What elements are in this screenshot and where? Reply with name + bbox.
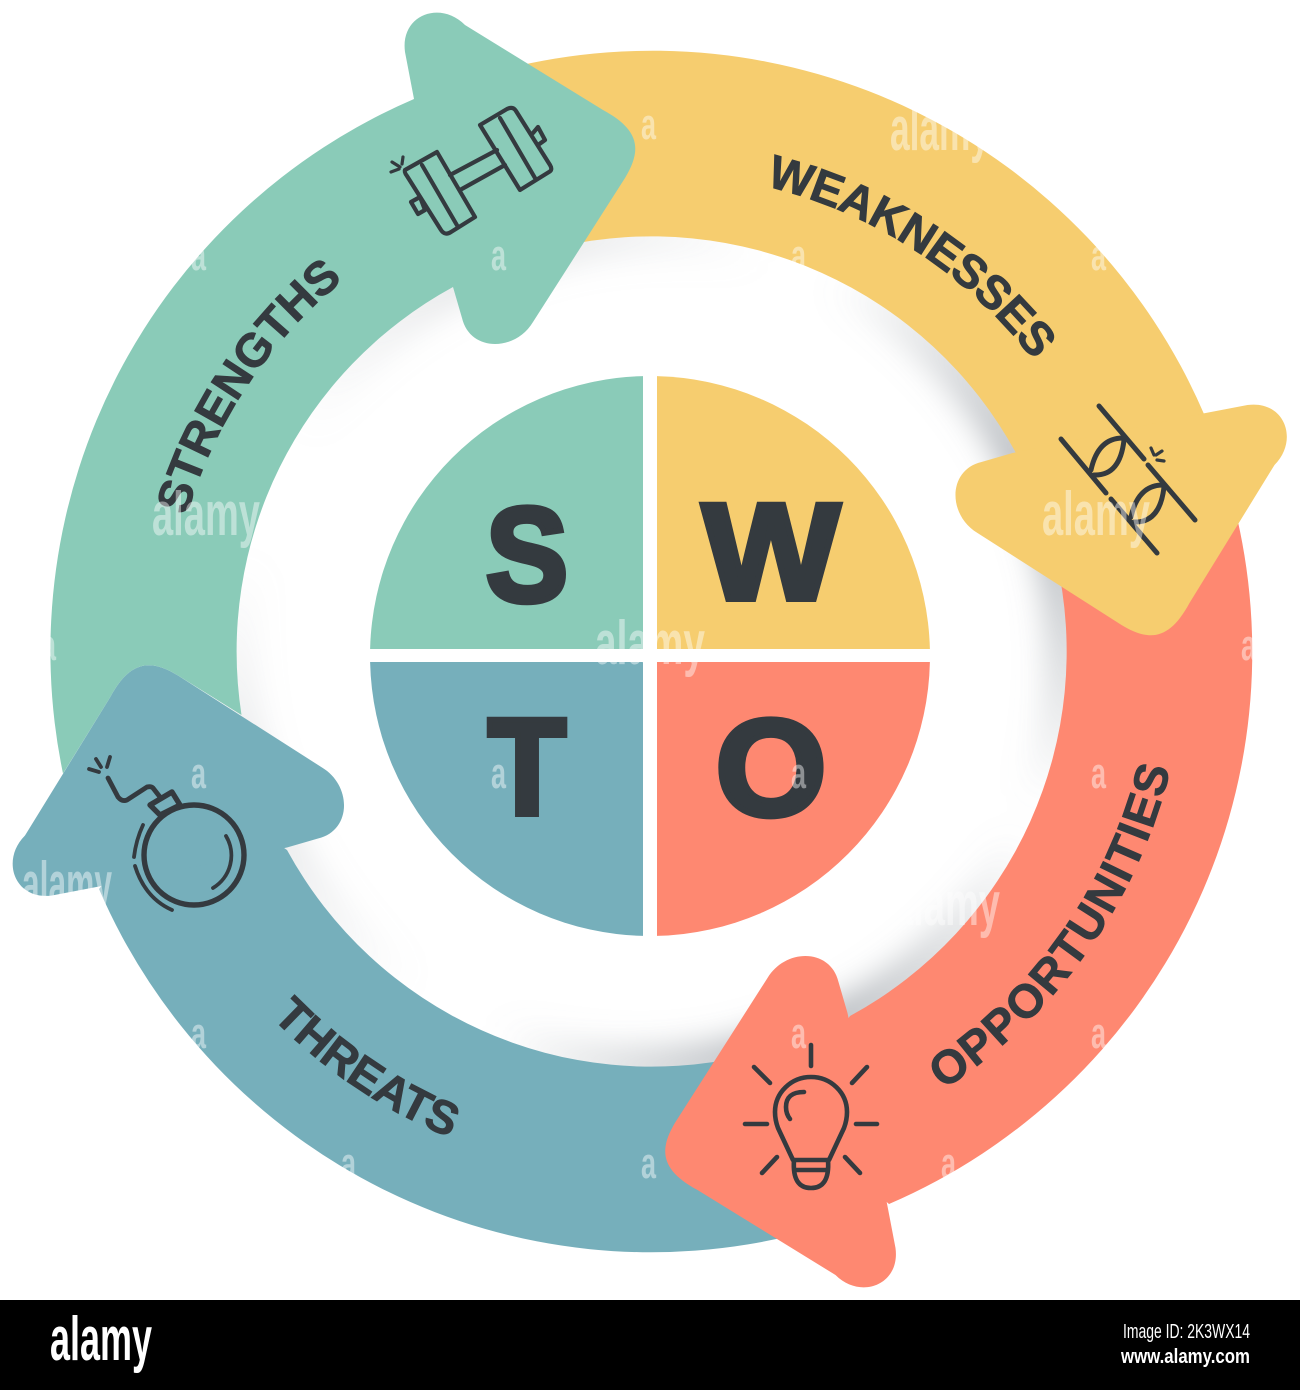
watermarks: a [191,749,206,798]
quadrant O [657,662,930,936]
icon: dumbbell [391,108,551,234]
watermarks: a [641,100,656,149]
watermarks: alamy [892,870,1000,939]
watermarks: a [1091,231,1106,280]
footer image id: Image ID: 2K3WX14 [1123,1321,1250,1343]
watermarks: alamy [595,609,705,678]
watermarks: a [941,1139,956,1188]
watermarks: a [341,1139,356,1188]
arrow: strengths [50,12,636,774]
soft shadow inside the ring [237,237,1065,1065]
watermarks: alamy [22,850,112,919]
arrow: threats [12,625,830,1255]
quadrant W [657,376,930,649]
watermarks: a [791,1009,806,1058]
icon: broken chain [1061,406,1195,553]
watermarks: a [41,361,56,410]
central SWOT circle [370,376,930,936]
watermarks: a [41,621,56,670]
icon: bomb [89,757,244,910]
footer url: www.alamy.com [1120,1346,1250,1368]
quadrant O: O [716,691,826,844]
label: weaknesses: WEAKNESSES [773,154,1054,356]
quadrant S: S [486,480,568,630]
watermarks: a [191,231,206,280]
footer logo: alamy [50,1305,152,1374]
label: threats: THREATS [279,994,458,1134]
watermarks: alamy [152,480,260,549]
arrow: opportunities [625,472,1270,1288]
icon: light bulb [745,1045,877,1188]
watermarks [22,95,1256,1188]
footer bar [0,1300,1300,1390]
quadrant T [370,662,643,936]
watermarks: alamy [890,95,990,164]
watermarks: a [641,1139,656,1188]
watermarks: a [191,1009,206,1058]
watermarks: a [491,749,506,798]
watermarks: alamy [1042,480,1150,549]
quadrant S [370,376,643,649]
label: strengths: STRENGTHS [158,260,339,512]
watermarks: a [791,749,806,798]
label: opportunities: OPPORTUNITIES [932,764,1168,1084]
quadrant T: T [488,691,566,844]
watermarks: a [1091,1009,1106,1058]
watermarks: a [1091,749,1106,798]
arrow: weaknesses [476,47,1287,648]
watermarks: a [1241,621,1256,670]
watermarks: a [491,231,506,280]
watermarks: a [791,231,806,280]
quadrant W: W [702,475,840,628]
